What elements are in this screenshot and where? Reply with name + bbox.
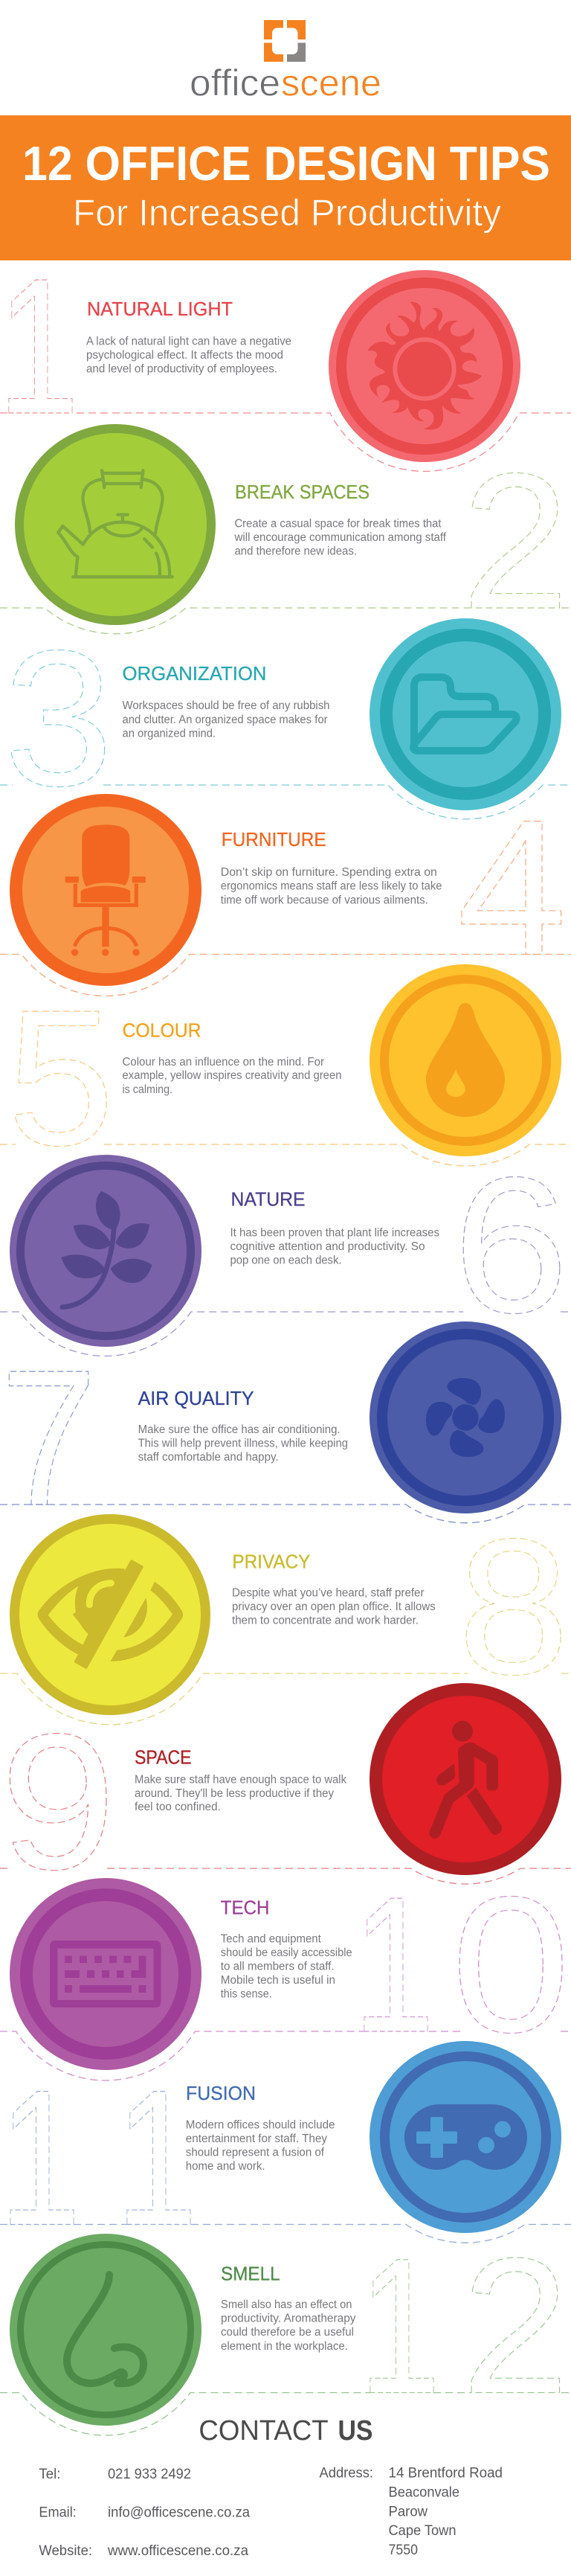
dashed divider line: [0, 608, 571, 634]
badge: keyboard: [10, 1878, 201, 2070]
badge: fan: [370, 1321, 561, 1513]
dashed number 11: 1: [116, 2049, 198, 2266]
contact details left: www.officescene.co.za: [107, 2543, 248, 2559]
body text: Colour has an influence on the mind. For: [122, 1056, 324, 1068]
dashed number 3: 3: [4, 609, 113, 826]
body text: Mobile tech is useful in: [221, 1974, 335, 1987]
panel: organization: [0, 609, 571, 826]
body text: time off work because of various ailments.: [221, 894, 428, 906]
body text: ergonomics means staff are less likely to take: [221, 880, 442, 893]
body text: A lack of natural light can have a negative: [86, 335, 291, 348]
body text: This will help prevent illness, while keeping: [138, 1438, 348, 1450]
panel: smell: [0, 2217, 571, 2435]
contact details address: Cape Town: [388, 2523, 457, 2539]
body text: Smell also has an effect on: [221, 2298, 352, 2311]
icon: office chair: [65, 824, 146, 956]
dashed number 10: 1: [353, 1856, 435, 2072]
dashed divider line: [0, 954, 571, 996]
panel: fusion: [0, 2041, 571, 2266]
panel: break spaces: [0, 424, 571, 650]
contact details address: [320, 2466, 503, 2558]
badge: colour drop: [370, 964, 561, 1156]
panel: air quality: [0, 1321, 571, 1546]
dashed divider line: [0, 1144, 571, 1166]
dashed number 8: 8: [457, 1499, 570, 1715]
dashed divider line: [0, 1505, 571, 1523]
panel: privacy: [0, 1499, 571, 1725]
dashed divider line: [0, 785, 571, 819]
contact details left: [39, 2467, 250, 2559]
heading: PRIVACY: [232, 1552, 310, 1573]
body text: Despite what you’ve heard, staff prefer: [232, 1586, 424, 1599]
contact details address: Beaconvale: [388, 2484, 459, 2500]
badge: eye: [10, 1514, 210, 1715]
logo wordmark: [190, 63, 381, 104]
heading: BREAK SPACES: [235, 482, 370, 503]
body text: an organized mind.: [122, 727, 216, 740]
dashed number 10: [353, 1856, 570, 2073]
dashed number 10: 0: [451, 1856, 570, 2073]
panel: nature: [0, 1138, 571, 1356]
icon: drop: [426, 1003, 505, 1117]
body text: will encourage communication among staff: [234, 531, 447, 544]
panel: furniture: [0, 779, 571, 996]
panel: natural light: [0, 238, 571, 471]
body text: [234, 518, 447, 558]
heading: AIR QUALITY: [138, 1388, 254, 1409]
heading: NATURAL LIGHT: [87, 299, 233, 320]
contact details address: 7550: [388, 2543, 418, 2558]
contact details left: Email:: [39, 2505, 77, 2521]
body text: [230, 1226, 439, 1267]
icon: kettle: [58, 470, 172, 577]
dashed number 5: 5: [7, 970, 114, 1186]
badge: game controller: [370, 2041, 561, 2233]
dashed divider line: [0, 1868, 571, 1884]
body text: this sense.: [221, 1988, 272, 2001]
contact details left: Website:: [39, 2543, 92, 2559]
body text: [122, 1056, 342, 1096]
body text: around. They'll be less productive if they: [135, 1787, 334, 1800]
dashed number 12: 1: [359, 2217, 441, 2434]
dashed divider line: [0, 1673, 571, 1725]
title: 12 OFFICE DESIGN TIPS: [22, 136, 550, 190]
banner: [0, 115, 571, 260]
icon: crossed-out eye: [37, 1561, 183, 1667]
subtitle: For Increased Productivity: [73, 192, 501, 234]
badge: sun: [329, 270, 520, 462]
heading: ORGANIZATION: [122, 664, 266, 685]
body text: is calming.: [122, 1083, 172, 1096]
contact details left: 021 933 2492: [108, 2467, 191, 2482]
icon: keyboard: [50, 1941, 161, 2008]
dashed number 7: 7: [0, 1330, 97, 1546]
body text: privacy over an open plan office. It allows: [232, 1601, 436, 1613]
badge: nose: [10, 2234, 201, 2426]
body text: staff comfortable and happy.: [138, 1451, 279, 1464]
dashed divider line: [0, 2031, 571, 2080]
body text: home and work.: [186, 2160, 265, 2173]
icon: fan: [426, 1378, 505, 1457]
body text: Workspaces should be free of any rubbish: [122, 699, 330, 712]
body text: Modern offices should include: [186, 2118, 335, 2131]
dashed number 12: [359, 2217, 570, 2435]
body text: [138, 1423, 348, 1464]
body text: [221, 866, 442, 906]
body text: [221, 2298, 356, 2353]
heading: SPACE: [135, 1747, 192, 1768]
body text: could therefore be a useful: [221, 2326, 354, 2339]
body text: productivity. Aromatherapy: [221, 2313, 356, 2325]
icon: sun: [367, 302, 482, 429]
dashed divider line: [0, 413, 571, 471]
body text: example, yellow inspires creativity and green: [122, 1069, 342, 1082]
body text: Don’t skip on furniture. Spending extra on: [221, 866, 437, 879]
body text: Make sure the office has air conditioning.: [138, 1423, 341, 1436]
dashed number 6: 6: [453, 1138, 569, 1353]
heading: SMELL: [221, 2264, 280, 2285]
dashed number 11: 1: [0, 2049, 81, 2266]
contact details address: 14 Brentford Road: [388, 2466, 503, 2481]
body text: Make sure staff have enough space to walk: [135, 1773, 346, 1786]
heading: FURNITURE: [222, 830, 326, 850]
body text: them to concentrate and work harder.: [232, 1615, 419, 1627]
icon: game controller: [404, 2104, 527, 2170]
dashed divider line: [0, 2225, 571, 2243]
body text: It has been proven that plant life increases: [230, 1226, 439, 1239]
icon: folder: [413, 677, 517, 751]
body text: [221, 1932, 352, 2001]
body text: [232, 1586, 436, 1627]
heading: FUSION: [186, 2083, 256, 2104]
body text: Tech and equipment: [221, 1932, 322, 1945]
contact details address: Parow: [388, 2504, 428, 2519]
body text: element in the workplace.: [221, 2340, 348, 2353]
badge: office chair: [10, 794, 201, 986]
body text: entertainment for staff. They: [186, 2133, 327, 2145]
contact heading: US: [338, 2415, 373, 2447]
panel: colour: [0, 964, 571, 1186]
contact details left: Tel:: [39, 2467, 60, 2482]
heading: NATURE: [230, 1190, 305, 1211]
badge: plant: [10, 1155, 201, 1347]
dashed number 1: 1: [0, 238, 80, 454]
body text: feel too confined.: [135, 1801, 221, 1813]
dashed divider line: [0, 1312, 571, 1356]
panel: space: [0, 1683, 571, 1910]
body text: and clutter. An organized space makes for: [122, 714, 327, 726]
contact heading: CONTACT: [199, 2415, 329, 2447]
icon: plant: [61, 1191, 152, 1307]
heading: COLOUR: [122, 1021, 201, 1042]
logo wordmark: office: [190, 63, 280, 104]
body text: to all members of staff.: [221, 1960, 335, 1973]
contact details left: info@officescene.co.za: [108, 2505, 250, 2521]
body text: and level of productivity of employees.: [86, 363, 277, 376]
body text: Create a casual space for break times that: [235, 518, 442, 531]
dashed number 2: 2: [462, 434, 570, 650]
body text: pop one on each desk.: [230, 1255, 342, 1267]
icon: walking person: [429, 1721, 502, 1839]
badge: walking person: [370, 1683, 561, 1875]
dashed divider line: [0, 2393, 571, 2435]
body text: should be easily accessible: [221, 1947, 352, 1959]
body text: [86, 335, 291, 376]
badge: folder: [370, 618, 561, 810]
dashed number 11: [0, 2049, 198, 2266]
dashed number 9: 9: [0, 1694, 116, 1910]
panel: tech: [0, 1856, 571, 2080]
logo wordmark: scene: [281, 63, 381, 104]
body text: psychological effect. It affects the mood: [86, 349, 283, 362]
dashed number 4: 4: [457, 779, 567, 996]
icon: nose: [67, 2275, 143, 2383]
panel: contact: [39, 2415, 503, 2559]
body text: [186, 2118, 335, 2173]
contact details address: Address:: [320, 2466, 373, 2481]
badge: kettle: [15, 424, 216, 625]
body text: [135, 1773, 346, 1813]
body text: should represent a fusion of: [186, 2146, 325, 2159]
logo: officescene: [190, 20, 381, 104]
dashed number 12: 2: [462, 2219, 570, 2435]
heading: TECH: [221, 1897, 269, 1918]
icon: logo mark: [264, 20, 306, 62]
body text: [122, 699, 330, 740]
body text: and therefore new ideas.: [235, 545, 357, 558]
body text: cognitive attention and productivity. So: [230, 1240, 425, 1253]
